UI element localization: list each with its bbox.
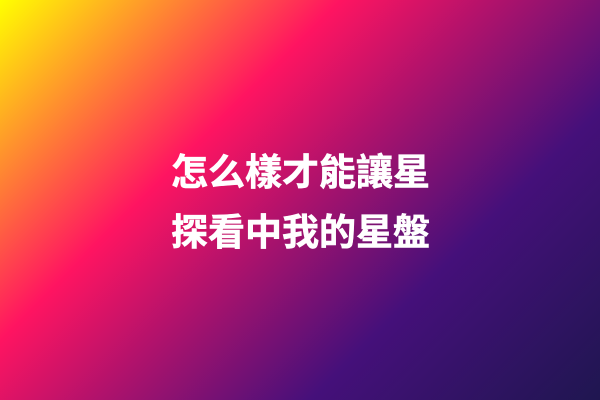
title (171, 152, 430, 253)
title: 怎么樣才能讓星 (171, 152, 430, 193)
title: 探看中我的星盤 (171, 212, 430, 253)
